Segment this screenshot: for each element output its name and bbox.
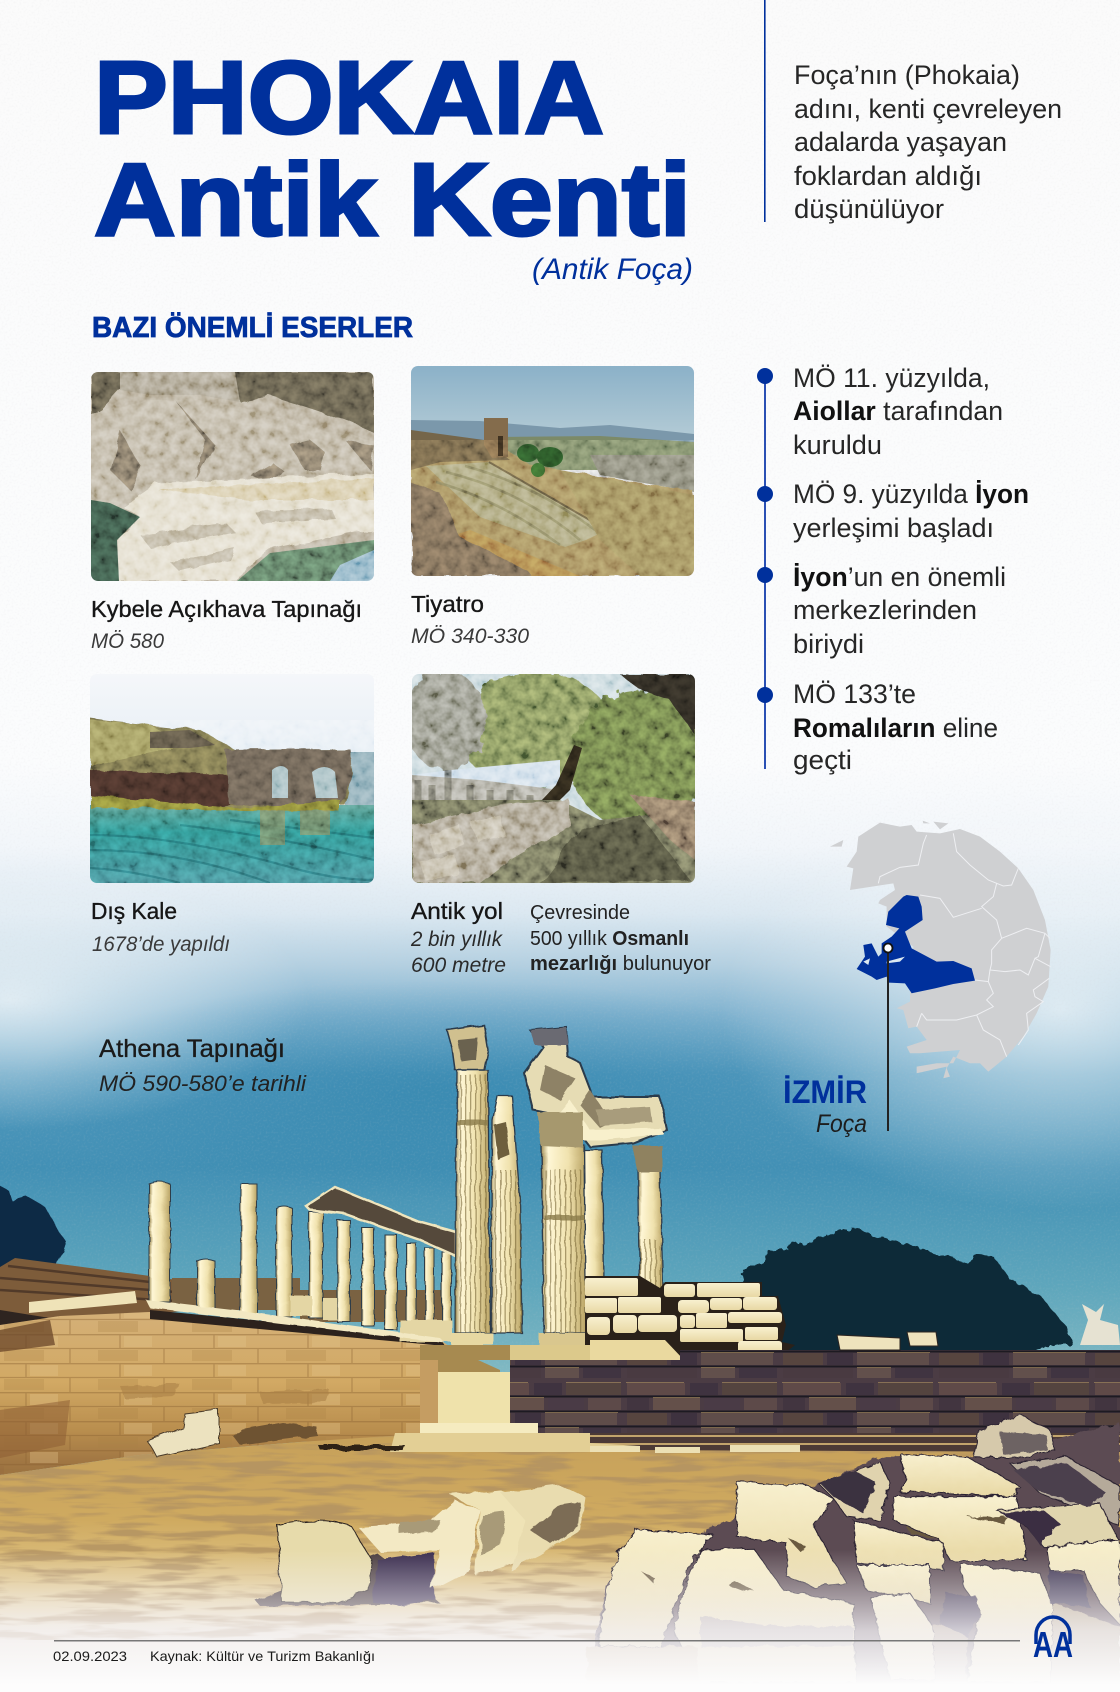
foreground rock pile (587, 1415, 1120, 1690)
photo: ancient road (405, 670, 710, 883)
timeline text: İyon’un en önemli (793, 562, 1006, 592)
label: Izmir Foca: Foça (816, 1110, 867, 1138)
timeline text: geçti (793, 745, 852, 775)
caption: Kybele: MÖ 580 (91, 630, 164, 653)
caption: Kybele: Kybele Açıkhava Tapınağı (91, 596, 362, 622)
title: Antik Kenti (94, 142, 691, 257)
timeline (757, 363, 1029, 775)
caption: Ottoman cemetery note (530, 901, 711, 975)
caption: Tiyatro: Tiyatro (411, 591, 484, 617)
caption: Antik yol (410, 898, 506, 977)
large standing columns (447, 1025, 667, 1345)
caption: Ottoman cemetery note: mezarlığı bulunuyor (530, 952, 711, 975)
caption: Antik yol: 2 bin yıllık (410, 928, 503, 951)
scene: Athena temple ruins (0, 1025, 1120, 1692)
caption: Ottoman cemetery note: 500 yıllık Osmanlı (530, 927, 689, 950)
AA logo: AA (1033, 1624, 1073, 1665)
Izmir province (857, 895, 975, 993)
photo: Kybele temple (91, 372, 374, 581)
caption: Athena temple: Athena Tapınağı (99, 1035, 285, 1063)
colonnade columns (146, 1182, 456, 1343)
caption: Dış Kale: 1678’de yapıldı (92, 933, 230, 956)
caption: Ottoman cemetery note: Çevresinde (530, 901, 630, 924)
vertical divider: intro (764, 0, 766, 222)
intro text: Foça’nın (Phokaia) (794, 60, 1020, 90)
timeline text: biriydi (793, 629, 864, 659)
timeline text: MÖ 133’te (793, 679, 916, 709)
photo: theatre (411, 366, 694, 576)
caption: Antik yol: 600 metre (411, 954, 506, 977)
timeline text: kuruldu (793, 430, 882, 460)
label: Izmir Foca: İZMİR (783, 1074, 867, 1110)
timeline text: merkezlerinden (793, 595, 977, 625)
podium (390, 1345, 800, 1453)
retaining wall (0, 1310, 470, 1475)
caption: Kybele (91, 596, 362, 653)
caption: Tiyatro (411, 591, 529, 648)
AA logo (1033, 1617, 1073, 1665)
middle rock row (255, 1485, 585, 1606)
timeline text: Romalıların eline (793, 713, 998, 743)
title (94, 40, 691, 257)
intro text: düşünülüyor (794, 194, 944, 224)
map: Izmir location (830, 821, 1051, 1078)
caption: Antik yol: Antik yol (411, 898, 503, 924)
back stepped wall (0, 1258, 450, 1345)
timeline text: Aiollar tarafından (793, 396, 1003, 426)
footer: Kaynak: Kültür ve Turizm Bakanlığı (150, 1648, 375, 1664)
photo: outer castle (90, 674, 374, 883)
footer (53, 1640, 1020, 1664)
caption: Tiyatro: MÖ 340-330 (411, 625, 529, 648)
intro text: adalarda yaşayan (794, 127, 1007, 157)
timeline text: MÖ 11. yüzyılda, (793, 363, 990, 393)
heading: artifacts: BAZI ÖNEMLİ ESERLER (92, 311, 413, 344)
label: Izmir Foca (783, 1074, 867, 1138)
bottom fade (0, 1550, 1120, 1692)
intro text: foklardan aldığı (794, 161, 982, 191)
caption: Athena temple (99, 1035, 307, 1096)
map pointer (884, 944, 892, 1131)
stepped stone blocks (440, 1276, 795, 1365)
caption: Dış Kale (91, 898, 230, 956)
footer: 02.09.2023 (53, 1648, 127, 1664)
dark stone wall (510, 1304, 1120, 1453)
caption: Dış Kale: Dış Kale (91, 898, 177, 924)
timeline dots (757, 368, 773, 703)
timeline text: yerleşimi başladı (793, 513, 994, 543)
intro text: adını, kenti çevreleyen (794, 94, 1062, 124)
ground (0, 1434, 1120, 1692)
timeline text: MÖ 9. yüzyılda İyon (793, 479, 1029, 509)
intro text (794, 60, 1062, 224)
timeline text (793, 363, 1029, 775)
tree: left (0, 1175, 65, 1280)
title: PHOKAIA (94, 40, 604, 155)
tree: right (738, 1226, 1072, 1360)
small left stone fragment (147, 1410, 405, 1457)
subtitle: (Antik Foça) (532, 253, 693, 286)
caption: Athena temple: MÖ 590-580’e tarihli (99, 1071, 307, 1096)
